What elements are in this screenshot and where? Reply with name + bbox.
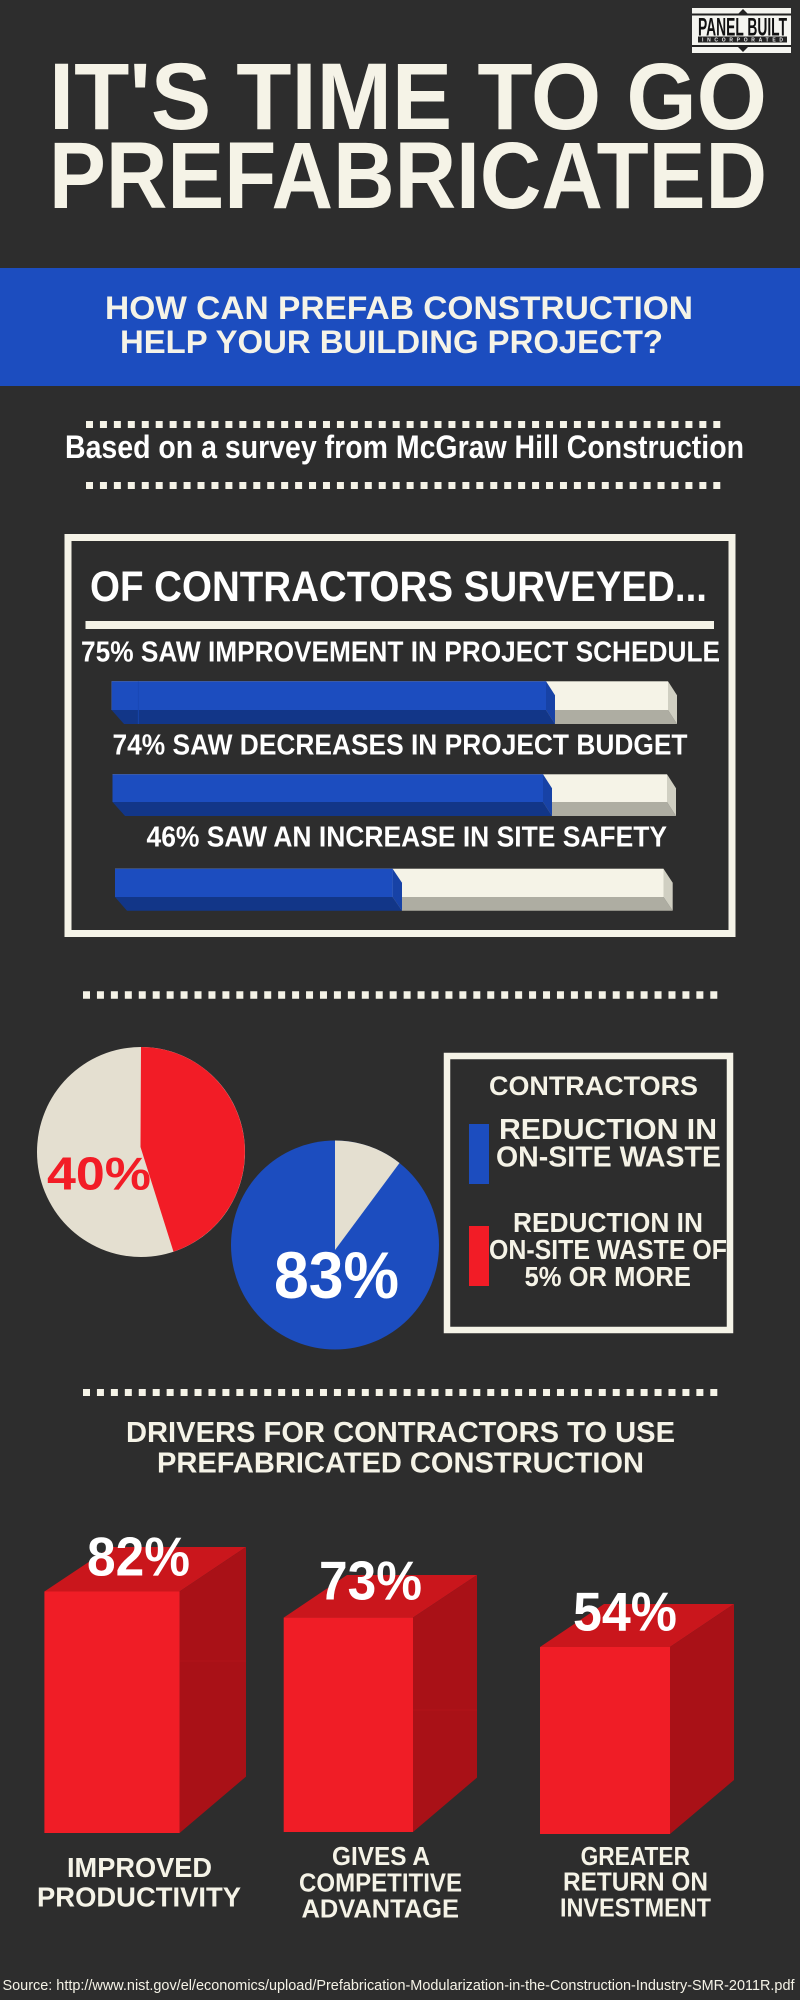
legend xyxy=(447,1056,730,1330)
logo: Panel Built xyxy=(692,8,791,53)
legend swatch: red xyxy=(469,1226,489,1286)
stat label: 74% budget: 74% SAW DECREASES IN PROJECT BUDGET xyxy=(112,730,688,762)
label: greater return on investment xyxy=(560,1841,711,1922)
legend item: reduction in on-site waste xyxy=(496,1114,721,1174)
banner: subtitle band: HELP YOUR BUILDING PROJECT? xyxy=(120,324,663,360)
stat label: 75% schedule: 75% SAW IMPROVEMENT IN PROJECT SCHEDULE xyxy=(81,636,720,668)
bar: 46% safety xyxy=(115,869,673,911)
label: competitive advantage: ADVANTAGE xyxy=(302,1894,459,1924)
label: greater return on investment: GREATER xyxy=(581,1841,690,1871)
value: 54%: 54% xyxy=(573,1580,677,1642)
legend item: reduction in on-site waste: REDUCTION IN xyxy=(499,1114,717,1146)
bar: greater return xyxy=(540,1580,734,1922)
title: IT'S TIME TO GO xyxy=(49,44,767,150)
label: competitive advantage: GIVES A xyxy=(332,1841,430,1871)
legend item: reduction in on-site waste: ON-SITE WASTE xyxy=(496,1142,721,1174)
chart: 40% pie xyxy=(37,1047,245,1257)
legend item: reduction of 5% or more: REDUCTION IN xyxy=(513,1207,703,1238)
label: greater return on investment: INVESTMENT xyxy=(560,1892,711,1922)
banner: subtitle band xyxy=(0,268,800,386)
panel: contractors surveyed xyxy=(68,538,732,934)
bar: 75% schedule xyxy=(112,681,677,724)
title xyxy=(49,44,767,229)
legend swatch: blue xyxy=(469,1124,489,1184)
bar: improved productivity xyxy=(37,1526,246,1912)
label: improved productivity: IMPROVED xyxy=(67,1852,212,1883)
heading: drivers xyxy=(126,1417,675,1480)
logo: Panel Built: INCORPORATED xyxy=(702,38,783,44)
heading: drivers: PREFABRICATED CONSTRUCTION xyxy=(157,1448,644,1480)
value: 83%: 83% xyxy=(274,1238,399,1312)
banner: subtitle band: HOW CAN PREFAB CONSTRUCTION xyxy=(105,290,693,326)
chart: 83% pie xyxy=(231,1140,439,1350)
label: improved productivity xyxy=(37,1852,241,1912)
label: competitive advantage xyxy=(299,1841,462,1924)
value: 73%: 73% xyxy=(319,1550,422,1612)
bar: 74% budget xyxy=(112,774,676,816)
legend item: reduction of 5% or more xyxy=(489,1207,727,1292)
legend item: reduction of 5% or more: 5% OR MORE xyxy=(524,1261,691,1292)
label: improved productivity: PRODUCTIVITY xyxy=(37,1882,241,1912)
stat label: 46% safety: 46% SAW AN INCREASE IN SITE SAFETY xyxy=(146,822,667,854)
heading: of contractors surveyed: OF CONTRACTORS SURVEYED... xyxy=(90,563,707,611)
value: 40%: 40% xyxy=(47,1148,151,1200)
value: 82%: 82% xyxy=(87,1526,190,1588)
heading: drivers: DRIVERS FOR CONTRACTORS TO USE xyxy=(126,1417,675,1449)
legend title: CONTRACTORS xyxy=(489,1071,698,1101)
legend item: reduction of 5% or more: ON-SITE WASTE OF xyxy=(489,1234,727,1265)
label: greater return on investment: RETURN ON xyxy=(563,1866,708,1896)
label: competitive advantage: COMPETITIVE xyxy=(299,1868,462,1898)
bar: competitive advantage xyxy=(284,1550,477,1924)
